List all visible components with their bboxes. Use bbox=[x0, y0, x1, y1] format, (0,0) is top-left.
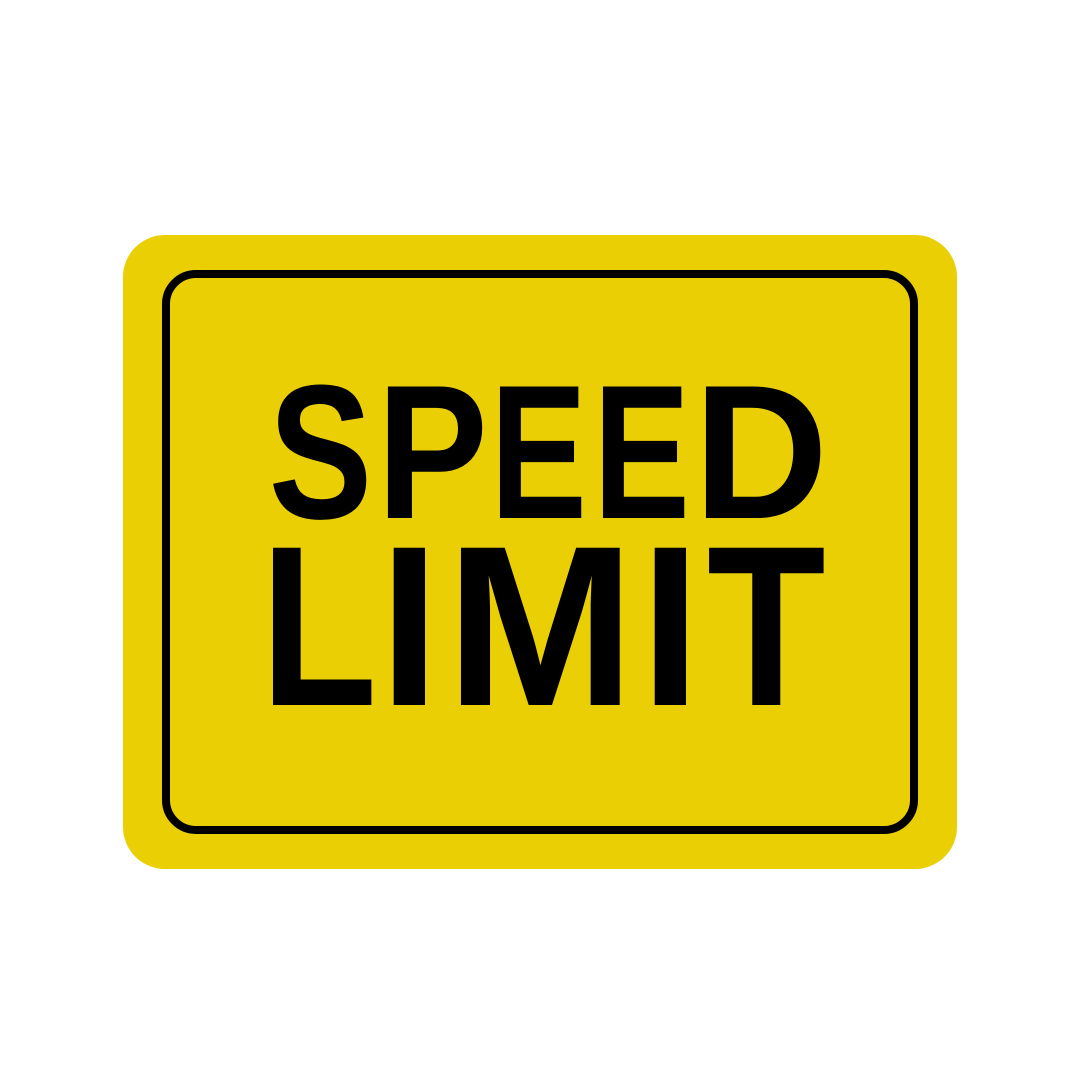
sign inner border bbox=[166, 274, 914, 830]
heading: SPEED: S bbox=[269, 345, 372, 559]
heading: LIMIT bbox=[260, 498, 826, 754]
heading: LIMIT: I bbox=[640, 499, 700, 754]
heading: SPEED: D bbox=[694, 346, 828, 560]
heading: SPEED bbox=[269, 345, 828, 560]
heading: LIMIT: I bbox=[379, 499, 439, 754]
heading: LIMIT: M bbox=[446, 499, 635, 754]
heading: LIMIT: T bbox=[707, 498, 826, 753]
sign background panel bbox=[123, 235, 957, 869]
heading: SPEED: P bbox=[377, 345, 488, 559]
heading: LIMIT: L bbox=[260, 498, 377, 754]
heading: SPEED: E bbox=[490, 346, 587, 559]
heading: SPEED: E bbox=[593, 346, 690, 559]
